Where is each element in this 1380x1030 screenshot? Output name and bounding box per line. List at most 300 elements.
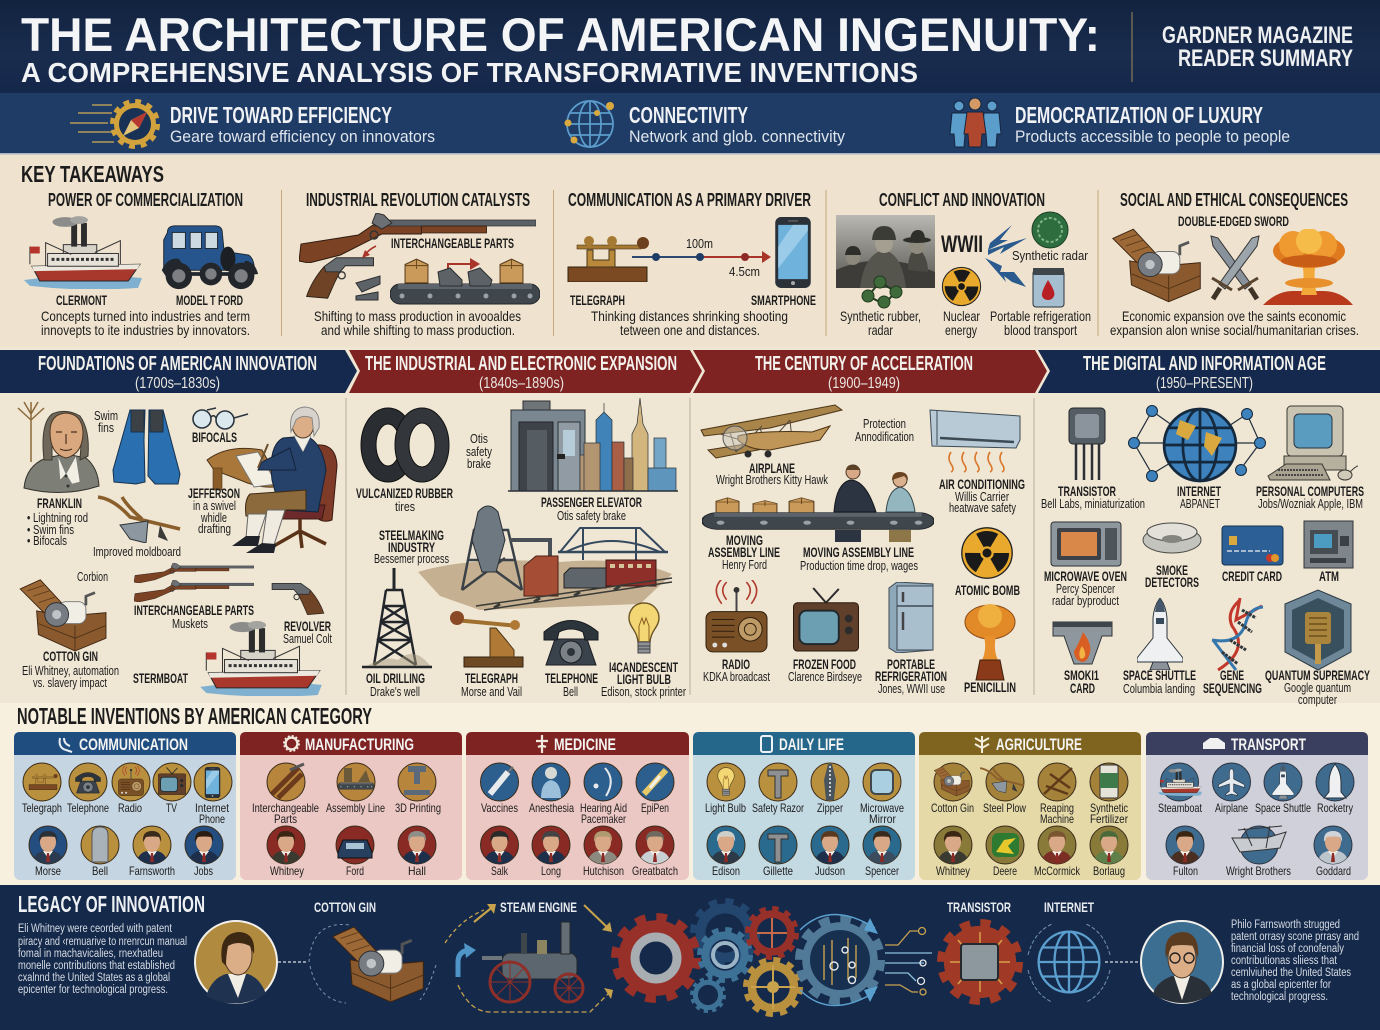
icon: green seal xyxy=(1032,212,1068,248)
labels: medicine xyxy=(481,801,678,878)
labels: transport: Steamboat xyxy=(1158,801,1202,815)
icon: steamboat xyxy=(200,621,322,697)
era panel: acceleration: ATOMIC BOMB xyxy=(955,582,1020,598)
label: interchangeable parts xyxy=(134,602,254,631)
icons: transport inventions xyxy=(1160,763,1354,864)
category icon xyxy=(975,736,989,753)
icon: telephone xyxy=(544,620,598,665)
label: Jefferson: in a swivel xyxy=(193,498,236,513)
icon: blood transport unit xyxy=(1033,268,1064,307)
labels: communication: Telegraph xyxy=(22,801,62,815)
label: radio xyxy=(703,656,770,684)
icon: steam engine xyxy=(482,922,583,1002)
theme: efficiency xyxy=(170,102,435,146)
labels: agriculture: Steel Plow xyxy=(983,801,1026,815)
label: oil drilling: OIL DRILLING xyxy=(366,670,425,686)
icons: medicine inventions xyxy=(480,763,674,864)
icon: internet globe xyxy=(1028,924,1110,1002)
category icon xyxy=(1203,738,1225,749)
labels: communication: Bell xyxy=(92,864,108,878)
caption: Thinking distances shrinking shooting xyxy=(591,308,788,324)
banner: acceleration: (1900–1949) xyxy=(828,375,900,392)
pictograms: medicine xyxy=(484,767,671,866)
label: Franklin: • Bifocals xyxy=(27,533,67,548)
labels: daily life: Light Bulb xyxy=(705,801,746,815)
label: smoki card: SMOKI1 xyxy=(1064,667,1099,683)
text: Whitney note: monelle contributions that established xyxy=(18,960,175,972)
icon: air conditioner xyxy=(930,410,1020,472)
icon: ATM xyxy=(1304,521,1353,568)
icon: credit card xyxy=(1222,526,1283,565)
label: light bulb: LIGHT BULB xyxy=(617,671,671,687)
captions: energy xyxy=(945,322,977,338)
label: telephone xyxy=(545,670,598,699)
labels: daily life: Microwave xyxy=(860,801,904,815)
label: air conditioning xyxy=(939,476,1025,515)
icon: personal computer xyxy=(1268,406,1358,480)
label: internet xyxy=(1177,483,1221,511)
theme: connectivity xyxy=(629,102,845,146)
panel: legacy of innovation: STEAM ENGINE xyxy=(500,899,577,915)
labels: transport: Goddard xyxy=(1316,864,1351,878)
text: Farnsworth note: Philo Farnsworth strugged xyxy=(1231,919,1340,931)
label: elevator: PASSENGER ELEVATOR xyxy=(541,494,642,510)
banner: foundations: (1700s–1830s) xyxy=(135,375,220,392)
label: light bulb: Edison, stock printer xyxy=(601,684,686,699)
era panel: foundations xyxy=(18,402,337,697)
icon: mushroom cloud xyxy=(1263,228,1353,305)
theme: democratization: DEMOCRATIZATION OF LUXURY xyxy=(1015,102,1263,128)
labels: communication: Phone xyxy=(199,812,225,826)
icon: cotton gin xyxy=(20,580,106,651)
icon: cotton gin xyxy=(333,927,423,1002)
label: telephone: TELEPHONE xyxy=(545,670,598,686)
icons: agriculture inventions xyxy=(934,763,1128,864)
label: transistor: Bell Labs, miniaturization xyxy=(1041,496,1145,511)
label: interchangeable parts: INTERCHANGEABLE PARTS xyxy=(134,602,254,618)
labels: transport: Wright Brothers xyxy=(1226,864,1291,878)
era panel: foundations: Corbion xyxy=(77,569,108,584)
label: internet: ABPANET xyxy=(1180,496,1220,511)
theme: democratization xyxy=(1015,102,1290,146)
icon: radio xyxy=(706,579,767,652)
category: communication xyxy=(14,732,236,880)
label: light bulb xyxy=(601,659,686,699)
label: telegraph xyxy=(461,670,522,699)
label: moving assembly line: ASSEMBLY LINE xyxy=(708,544,780,560)
labels: manufacturing: Parts xyxy=(274,812,297,826)
category: transport xyxy=(1146,732,1368,880)
publication label xyxy=(1162,22,1353,72)
illustration: elevator xyxy=(511,401,585,491)
label: smoki card: CARD xyxy=(1070,680,1095,696)
icon: Model T xyxy=(162,226,258,289)
captions: blood transport xyxy=(1004,322,1077,338)
label: air conditioning: AIR CONDITIONING xyxy=(939,476,1025,492)
photo: soldiers xyxy=(836,215,935,288)
labels: agriculture: Synthetic xyxy=(1090,801,1128,815)
caption xyxy=(570,292,816,338)
captions: Portable refrigeration xyxy=(990,308,1091,324)
takeaway: industrial revolution: INDUSTRIAL REVOLUTION CATALYSTS xyxy=(306,190,530,210)
labels: daily life: Safety Razor xyxy=(752,801,804,815)
icon: telegraph key xyxy=(568,236,649,282)
label: revolver: REVOLVER xyxy=(284,618,331,634)
labels: manufacturing: Whitney xyxy=(270,864,304,878)
era panel: digital: CREDIT CARD xyxy=(1222,568,1282,584)
labels: transport: Rocketry xyxy=(1317,801,1353,815)
icon: conveyor with parts xyxy=(390,259,540,304)
labels: manufacturing: Ford xyxy=(346,864,364,878)
takeaway: conflict: Synthetic radar xyxy=(1012,248,1089,263)
label: swim fins: fins xyxy=(98,420,114,435)
banner: digital xyxy=(1038,350,1380,393)
label: space shuttle: SPACE SHUTTLE xyxy=(1123,667,1196,683)
label: quantum supremacy xyxy=(1265,667,1370,707)
heading: legacy: LEGACY OF INNOVATION xyxy=(18,891,205,917)
takeaway: social and ethical xyxy=(1110,190,1359,338)
portrait: Whitney xyxy=(195,921,277,1004)
takeaway: conflict xyxy=(836,190,1091,338)
icon: gear and compass xyxy=(70,102,157,146)
label: moving assembly line xyxy=(708,532,780,572)
icon: pistol xyxy=(307,258,373,298)
label: elevator: Otis safety brake xyxy=(557,508,626,523)
text: Whitney note: fomal in machavicalies, rnexhatleu xyxy=(18,948,163,960)
label: oil drilling: Drake's well xyxy=(370,684,420,699)
label: microwave: Percy Spencer xyxy=(1056,581,1115,596)
label: Jefferson: whidle xyxy=(200,510,227,525)
text: Farnsworth note: technological progress. xyxy=(1231,991,1328,1003)
label: Franklin xyxy=(27,495,88,548)
label: Otis safety brake: brake xyxy=(467,456,491,471)
takeaway: communication xyxy=(568,190,816,338)
category: daily life xyxy=(693,732,915,880)
icon: radiation xyxy=(962,528,1012,578)
label: airplane: AIRPLANE xyxy=(749,460,795,476)
caption: tetween one and distances. xyxy=(620,322,760,338)
category: agriculture: AGRICULTURE xyxy=(996,735,1082,754)
category: manufacturing: MANUFACTURING xyxy=(305,735,414,754)
flow arrows xyxy=(445,904,613,1012)
labels: transport: Airplane xyxy=(1215,801,1248,815)
text: Farnsworth note: financial loss of conofenaly xyxy=(1231,943,1344,955)
icon: flame card slot xyxy=(1053,622,1112,664)
distance line xyxy=(632,236,771,279)
label: transistor: TRANSISTOR xyxy=(1058,483,1116,499)
label: personal computers xyxy=(1256,483,1364,511)
label: gene sequencing: SEQUENCING xyxy=(1203,680,1262,696)
arrows and parts xyxy=(356,246,480,300)
captions: radar xyxy=(868,322,893,338)
header xyxy=(21,8,1353,88)
era panel: foundations: STERMBOAT xyxy=(133,670,188,686)
icon: Clermont steamboat xyxy=(24,216,142,289)
label: tires xyxy=(356,485,453,514)
captions xyxy=(41,292,250,338)
banner: acceleration xyxy=(693,350,1047,393)
panel: legacy of innovation: INTERNET xyxy=(1044,899,1094,915)
labels: manufacturing: 3D Printing xyxy=(395,801,441,815)
captions: Nuclear xyxy=(943,308,980,324)
labels: daily life: Gillette xyxy=(763,864,793,878)
banner: digital: (1950–PRESENT) xyxy=(1156,375,1253,392)
theme: connectivity: CONNECTIVITY xyxy=(629,102,748,128)
takeaway: conflict: CONFLICT AND INNOVATION xyxy=(879,190,1045,210)
distance line: 100m xyxy=(686,236,713,251)
labels: medicine: Hutchison xyxy=(583,864,624,878)
label: airplane xyxy=(716,460,828,487)
labels: medicine: EpiPen xyxy=(641,801,669,815)
label: revolver xyxy=(283,618,332,646)
heading: key takeaways: KEY TAKEAWAYS xyxy=(21,161,164,187)
distance line: 4.5cm xyxy=(729,264,760,279)
labels: manufacturing xyxy=(252,801,441,878)
icon: plow xyxy=(98,497,180,543)
era panel: foundations: Improved moldboard xyxy=(93,544,181,559)
icon: revolver xyxy=(272,583,324,615)
label: steelmaking: STEELMAKING xyxy=(379,527,444,543)
panel: key takeaways xyxy=(21,161,1359,338)
text: Farnsworth note: cemlviuhed the United States xyxy=(1231,967,1351,979)
label: moving assembly line: MOVING xyxy=(726,532,763,548)
label: swim fins: Swim xyxy=(94,408,118,423)
banner: industrial: THE INDUSTRIAL AND ELECTRONIC EXPANSION xyxy=(365,353,677,375)
icon: lightning rod xyxy=(18,402,44,462)
label: protection: Protection xyxy=(863,416,906,431)
label: production time: Production time drop, wages xyxy=(800,558,918,573)
era panel: industrial xyxy=(356,398,686,699)
icon: microwave xyxy=(1051,522,1121,566)
label: portable refrigeration: PORTABLE xyxy=(887,656,935,672)
labels: transport: Space Shuttle xyxy=(1255,801,1311,815)
icon: tires xyxy=(361,408,449,482)
labels: medicine: Salk xyxy=(491,864,509,878)
label: air conditioning: heatwave safety xyxy=(949,500,1016,515)
icon: smartphone xyxy=(775,217,811,288)
pictograms: transport xyxy=(1158,764,1349,866)
labels: communication: Farnsworth xyxy=(129,864,175,878)
label: Otis safety brake: Otis xyxy=(470,431,488,446)
label: Franklin: • Swim fins xyxy=(27,522,74,537)
labels: manufacturing: Hall xyxy=(408,864,426,878)
icon: mushroom and flask xyxy=(965,604,1015,680)
labels: communication: Internet xyxy=(195,801,230,815)
label: airplane: Wright Brothers Kitty Hawk xyxy=(716,472,828,487)
labels: manufacturing: Interchangeable xyxy=(252,801,319,815)
label: Otis safety brake: safety xyxy=(466,444,492,459)
title: THE ARCHITECTURE OF AMERICAN INGENUITY: xyxy=(21,8,1100,61)
icon: globe network xyxy=(1128,406,1266,482)
icon: light bulb xyxy=(629,603,659,653)
illustration: circuit traces xyxy=(885,928,932,995)
label: radio: KDKA broadcast xyxy=(703,669,770,684)
icon: radiation xyxy=(942,267,981,306)
label: portable refrigeration: REFRIGERATION xyxy=(875,668,947,684)
banner: industrial: (1840s–1890s) xyxy=(479,375,564,392)
pictograms: agriculture xyxy=(934,765,1125,866)
pictograms: manufacturing xyxy=(270,764,433,866)
labels: agriculture: Deere xyxy=(993,864,1017,878)
text: Farnsworth note: as a global epicenter for xyxy=(1231,979,1331,991)
label: cotton gin: vs. slavery impact xyxy=(33,675,107,690)
text: Whitney note: piracy and ‹remuarive to nrenrcun manual xyxy=(18,936,187,948)
era panel: acceleration xyxy=(701,405,1025,696)
takeaway: industrial revolution: INTERCHANGEABLE PARTS xyxy=(391,235,514,251)
category icon xyxy=(761,736,772,752)
label: radio: RADIO xyxy=(722,656,750,672)
label: air conditioning: Willis Carrier xyxy=(955,489,1009,504)
labels: daily life xyxy=(705,801,904,878)
caption xyxy=(314,308,521,338)
label: gene sequencing xyxy=(1203,667,1262,696)
label: microwave: radar byproduct xyxy=(1052,593,1119,608)
icon: biplane xyxy=(701,405,842,458)
takeaway: communication: COMMUNICATION AS A PRIMARY DRIVER xyxy=(568,190,811,210)
category: daily life: DAILY LIFE xyxy=(779,735,844,754)
captions: Synthetic rubber, xyxy=(840,308,921,324)
label: Franklin: FRANKLIN xyxy=(37,495,82,511)
category icon xyxy=(60,738,72,752)
text: Whitney note xyxy=(18,923,187,996)
labels: transport: Fulton xyxy=(1173,864,1198,878)
text: Farnsworth note xyxy=(1231,919,1359,1003)
label: portable refrigeration: Jones, WWII use xyxy=(878,681,945,696)
icon: oil derrick xyxy=(362,568,432,667)
illustration: assembly line with workers xyxy=(702,465,934,542)
icon: space shuttle xyxy=(1137,598,1183,670)
label: frozen food xyxy=(788,656,862,684)
theme: democratization: Products accessible to people to people xyxy=(1015,127,1290,146)
icon: people xyxy=(950,98,1001,147)
labels: transport xyxy=(1158,801,1353,878)
subtitle: A COMPREHENSIVE ANALYSIS OF TRANSFORMATIVE INVENTIONS xyxy=(21,57,918,88)
illustration: gear cluster xyxy=(616,902,880,1013)
labels: medicine: Hearing Aid xyxy=(580,801,627,815)
label: tires: VULCANIZED RUBBER xyxy=(356,485,453,501)
label: smoke detectors: SMOKE xyxy=(1156,562,1188,578)
takeaway: industrial revolution xyxy=(299,190,540,338)
captions: innovepts to ite industries by innovators. xyxy=(41,322,250,338)
label: steelmaking: Bessemer process xyxy=(374,551,449,566)
label: smoke detectors: DETECTORS xyxy=(1145,574,1199,590)
labels: communication: Telephone xyxy=(67,801,109,815)
era panel: foundations: BIFOCALS xyxy=(192,429,237,445)
labels: daily life: Spencer xyxy=(865,864,899,878)
label: transistor xyxy=(1041,483,1145,511)
label: interchangeable parts: Muskets xyxy=(172,616,208,631)
banner: acceleration: THE CENTURY OF ACCELERATION xyxy=(755,353,973,375)
era panel: digital: ATM xyxy=(1319,568,1339,584)
labels: communication: Morse xyxy=(35,864,61,878)
illustration: skyline xyxy=(580,398,676,491)
label: protection: Annodification xyxy=(855,429,914,444)
label: Otis safety brake xyxy=(466,431,492,471)
labels: medicine: Long xyxy=(541,864,561,878)
panel: legacy of innovation: TRANSISTOR xyxy=(947,899,1011,915)
category: communication: COMMUNICATION xyxy=(79,735,188,754)
banner: foundations: FOUNDATIONS OF AMERICAN INNOVATION xyxy=(38,353,317,375)
label: gene sequencing: GENE xyxy=(1220,667,1244,683)
icon: bifocals xyxy=(193,408,248,429)
label: revolver: Samuel Colt xyxy=(283,631,332,646)
label: production time: MOVING ASSEMBLY LINE xyxy=(803,544,914,560)
captions xyxy=(840,308,1091,338)
text: Whitney note: cxalnnd the United States as a global xyxy=(18,972,170,984)
theme: efficiency: Geare toward efficiency on innovators xyxy=(170,127,435,146)
label: space shuttle: Columbia landing xyxy=(1123,681,1195,696)
labels: agriculture xyxy=(931,801,1128,878)
labels: daily life: Zipper xyxy=(817,801,843,815)
captions: CLERMONT xyxy=(56,292,107,308)
illustration: Jefferson at swivel desk xyxy=(207,407,337,553)
category: medicine: MEDICINE xyxy=(554,735,616,754)
text: Farnsworth note: contributionas sliiess that xyxy=(1231,955,1338,967)
icon: globe network xyxy=(564,101,614,147)
label: protection xyxy=(855,416,914,444)
label: microwave: MICROWAVE OVEN xyxy=(1044,568,1127,584)
theme: connectivity: Network and glob. connectivity xyxy=(629,127,845,146)
takeaway: social and ethical: DOUBLE-EDGED SWORD xyxy=(1178,213,1289,229)
icon: DNA helix xyxy=(1212,598,1263,670)
label: Franklin: • Lightning rod xyxy=(27,510,88,525)
labels: daily life: Mirror xyxy=(869,812,896,826)
icons: communication inventions xyxy=(23,763,232,864)
category icon xyxy=(536,735,548,753)
caption: TELEGRAPH xyxy=(570,292,625,308)
label: cotton gin: COTTON GIN xyxy=(43,648,98,664)
icon: television xyxy=(794,588,858,651)
captions: MODEL T FORD xyxy=(176,292,243,308)
pictograms: daily life xyxy=(710,764,898,866)
era panel: digital xyxy=(1041,406,1370,707)
caption xyxy=(1110,308,1359,338)
label: steelmaking: INDUSTRY xyxy=(388,539,435,555)
portrait: Franklin xyxy=(24,411,99,493)
icon: transistor xyxy=(1069,408,1105,480)
labels: medicine: Anesthesia xyxy=(529,801,574,815)
caption: SMARTPHONE xyxy=(751,292,816,308)
label: Jefferson: JEFFERSON xyxy=(188,485,240,501)
labels: manufacturing: Assembly Line xyxy=(326,801,385,815)
label: oil drilling xyxy=(366,670,425,699)
icon: telegraph xyxy=(450,611,523,667)
labels: agriculture: Machine xyxy=(1040,812,1074,826)
panel: legacy of innovation xyxy=(18,891,1359,1013)
era panel: acceleration: PENICILLIN xyxy=(964,679,1016,695)
label: cotton gin xyxy=(22,648,119,690)
labels: communication: Jobs xyxy=(194,864,213,878)
label: telegraph: TELEGRAPH xyxy=(465,670,518,686)
heading: notable inventions: NOTABLE INVENTIONS BY AMERICAN CATEGORY xyxy=(17,703,372,729)
icon: smoke detector xyxy=(1143,523,1201,553)
text: Whitney note: Eli Whitney were ceorded with patent xyxy=(18,923,173,935)
banner: industrial xyxy=(349,350,702,393)
labels: communication: TV xyxy=(166,801,177,815)
labels: agriculture: McCormick xyxy=(1034,864,1081,878)
dashed ring around gin xyxy=(309,924,436,1003)
labels: agriculture: Whitney xyxy=(936,864,970,878)
label: cotton gin: Eli Whitney, automation xyxy=(22,663,119,678)
labels: agriculture: Borlaug xyxy=(1093,864,1125,878)
label: internet: INTERNET xyxy=(1177,483,1221,499)
takeaway: commercialization: POWER OF COMMERCIALIZATION xyxy=(48,190,243,210)
labels: communication: Radio xyxy=(118,801,142,815)
category: medicine xyxy=(466,732,689,880)
label: telegraph: Morse and Vail xyxy=(461,684,522,699)
label: quantum supremacy: Google quantum xyxy=(1284,680,1351,695)
pictograms: communication xyxy=(29,766,220,866)
